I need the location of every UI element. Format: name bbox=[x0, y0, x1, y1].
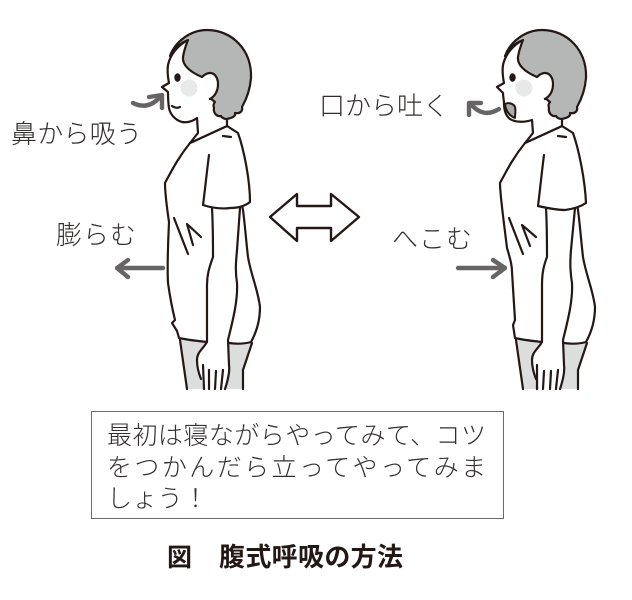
label: breathe in through nose: 鼻から吸う bbox=[11, 119, 142, 149]
sleeve bbox=[203, 126, 250, 208]
sleeve bbox=[538, 126, 586, 210]
ear bbox=[202, 73, 218, 99]
collar mark bbox=[223, 136, 231, 137]
shirt bbox=[500, 126, 595, 344]
cheek bbox=[516, 80, 532, 96]
arm bbox=[532, 208, 575, 389]
fingers bbox=[203, 365, 223, 389]
legs bbox=[180, 340, 252, 389]
fingers bbox=[537, 365, 558, 389]
hair bbox=[170, 30, 251, 119]
double arrow bbox=[270, 194, 359, 241]
ear bbox=[537, 73, 553, 99]
shirt bbox=[165, 126, 260, 344]
arrow: belly expands bbox=[117, 260, 163, 277]
arrow: inhale through nose bbox=[133, 95, 162, 108]
mouth bbox=[172, 106, 180, 108]
caption: 腹式呼吸の方法 bbox=[219, 542, 403, 572]
figure: inhaling person bbox=[162, 30, 260, 389]
callout: をつかんだら立ってやってみま bbox=[107, 454, 486, 482]
face and neck bbox=[162, 40, 227, 143]
arrow: belly contracts bbox=[458, 260, 505, 277]
face and neck bbox=[497, 40, 562, 143]
belly motion marks bbox=[174, 218, 201, 254]
hair bbox=[505, 30, 586, 119]
callout bbox=[92, 412, 504, 518]
figure: exhaling person bbox=[497, 30, 595, 389]
collar mark bbox=[558, 136, 566, 137]
open mouth bbox=[505, 103, 515, 118]
cheek bbox=[180, 80, 198, 96]
label: expands: 膨らむ bbox=[56, 220, 136, 250]
caption: 図 bbox=[167, 544, 192, 572]
belly motion marks bbox=[509, 218, 536, 254]
label: breathe out through mouth: 口から吐く bbox=[319, 91, 449, 121]
label: contracts: へこむ bbox=[392, 224, 472, 254]
eye bbox=[509, 73, 516, 82]
eye bbox=[174, 73, 181, 82]
callout: しょう！ bbox=[107, 485, 208, 513]
arrow: exhale through mouth bbox=[469, 103, 499, 115]
legs bbox=[516, 340, 587, 389]
callout: 最初は寝ながらやってみて、コツ bbox=[107, 422, 486, 450]
arm bbox=[197, 208, 240, 389]
